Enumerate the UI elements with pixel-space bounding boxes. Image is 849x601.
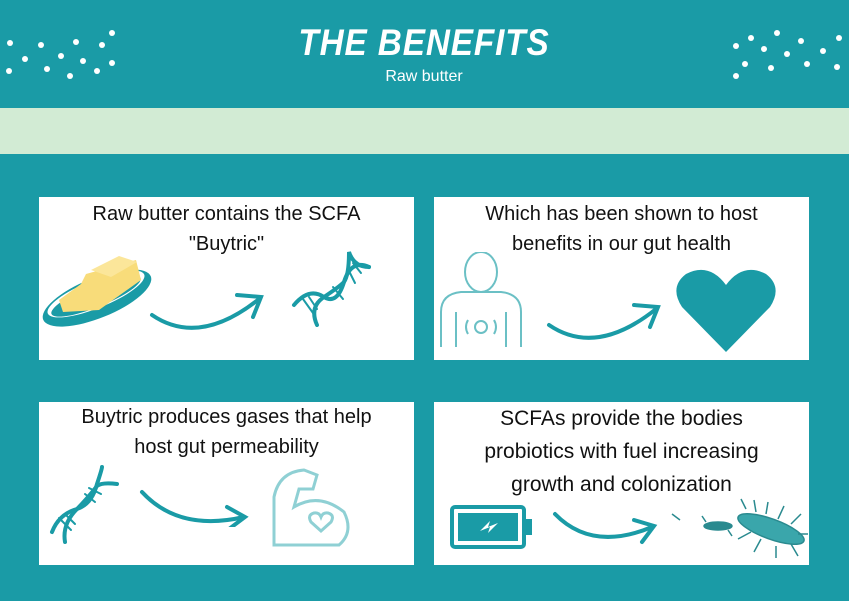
text: probiotics with fuel increasing — [484, 440, 759, 463]
icon: dna — [292, 251, 372, 327]
green band — [0, 108, 849, 154]
text: Which has been shown to host — [485, 203, 758, 225]
panel: probiotics — [434, 402, 809, 565]
text: growth and colonization — [511, 473, 732, 496]
text: benefits in our gut health — [512, 233, 731, 255]
icon: bacteria — [672, 498, 808, 558]
text — [93, 203, 360, 255]
text: Buytric produces gases that help — [81, 406, 372, 428]
icon: battery — [450, 505, 532, 549]
text — [484, 407, 759, 496]
arrow — [546, 303, 661, 340]
text — [81, 406, 372, 458]
panel: permeability — [39, 402, 414, 565]
text: Raw butter contains the SCFA — [93, 203, 360, 225]
text — [485, 203, 758, 255]
panel: butter — [39, 197, 414, 360]
text: SCFAs provide the bodies — [500, 407, 743, 430]
text: "Buytric" — [189, 233, 264, 255]
arrow — [140, 490, 249, 527]
text: host gut permeability — [134, 436, 319, 458]
icon: butter — [42, 256, 152, 327]
subtitle: Raw butter — [385, 68, 463, 85]
title: THE BENEFITS — [298, 22, 550, 63]
icon: heart — [676, 270, 776, 352]
icon: person — [440, 252, 522, 347]
panel: gut health — [434, 197, 809, 360]
arrow — [552, 512, 658, 544]
icon: dna — [50, 465, 119, 544]
icon: muscle arm — [272, 468, 350, 546]
arrow — [150, 293, 264, 330]
decorative dots — [6, 30, 842, 79]
